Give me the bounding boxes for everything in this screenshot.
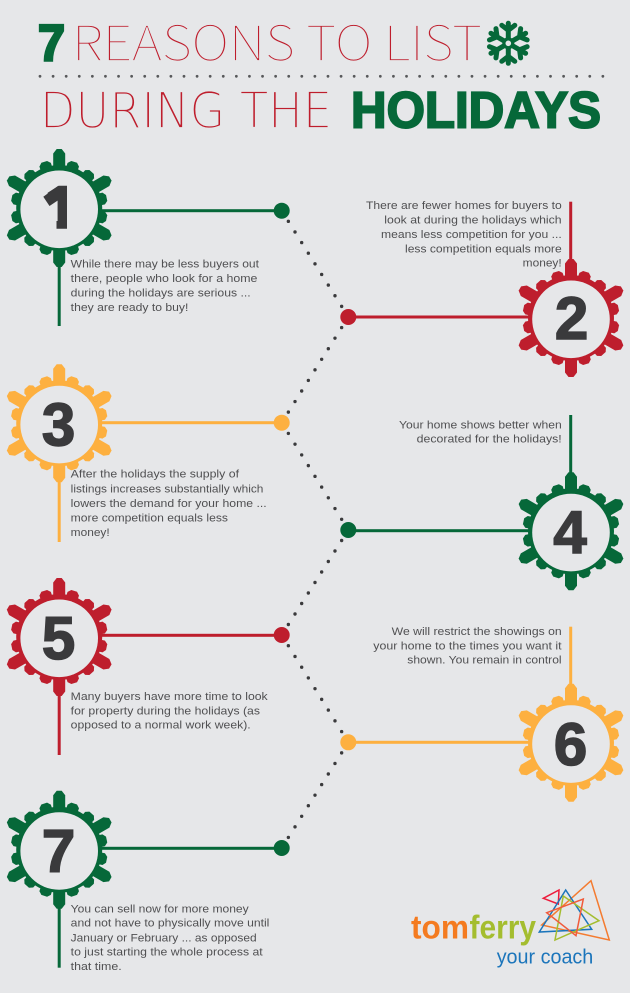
text 3: listings increases substantially which — [71, 483, 263, 495]
gear 2 — [510, 259, 630, 377]
title — [38, 4, 603, 140]
gear 7 — [0, 791, 121, 909]
title line two: DURING THE — [40, 83, 332, 140]
number 2: 2 — [555, 285, 588, 352]
text 2: less competition equals more — [405, 243, 562, 255]
text 6: We will restrict the showings on — [392, 626, 562, 638]
logo tagline: your coach — [497, 946, 593, 968]
text 7: You can sell now for more money — [71, 903, 249, 915]
number 1: 1 — [44, 174, 78, 241]
reason 4 — [340, 415, 630, 590]
text 2: money! — [523, 258, 562, 270]
reason 3 — [0, 364, 290, 542]
text 4: decorated for the holidays! — [417, 434, 562, 446]
number 1 — [43, 186, 67, 229]
number 4: 4 — [553, 499, 587, 566]
title line one: REASONS TO LIST — [72, 4, 482, 74]
text 1: there, people who look for a home — [71, 273, 257, 285]
reason 5 — [0, 578, 290, 755]
text 3: After the holidays the supply of — [71, 469, 240, 481]
reason 1 — [0, 149, 290, 326]
gear 3 — [0, 364, 121, 482]
text 3: money! — [71, 527, 110, 539]
text 5: Many buyers have more time to look — [71, 691, 268, 703]
text 1: While there may be less buyers out — [71, 259, 260, 271]
text 1: they are ready to buy! — [71, 302, 188, 314]
text 1: during the holidays are serious ... — [71, 288, 251, 300]
gear 4 — [510, 472, 630, 590]
text 6: your home to the times you want it — [373, 640, 562, 652]
text 2: look at during the holidays which — [384, 214, 562, 226]
text 5: opposed to a normal work week). — [71, 720, 251, 732]
logo triangles — [539, 881, 609, 940]
reason 6 — [340, 626, 630, 802]
text 7: January or February ... as opposed — [71, 932, 257, 944]
gear 6 — [510, 684, 630, 802]
text 7: that time. — [71, 961, 122, 973]
logo: ferry — [470, 908, 537, 946]
number 6: 6 — [554, 711, 587, 778]
title holidays: HOLIDAYS — [351, 82, 601, 139]
logo wordmark: tom — [411, 908, 469, 946]
gear 5 — [0, 578, 121, 696]
text 7: to just starting the whole process at — [71, 947, 264, 959]
reason 7 — [0, 791, 290, 973]
title number 7: 7 — [38, 14, 65, 72]
text 3: more competition equals less — [71, 512, 228, 524]
number 7: 7 — [42, 818, 75, 884]
dotted connector — [282, 211, 348, 848]
text 2: means less competition for you ... — [381, 229, 562, 241]
text 3: lowers the demand for your home ... — [71, 498, 267, 510]
text 5: for property during the holidays (as — [71, 705, 260, 717]
number 3: 3 — [42, 392, 75, 458]
number 5: 5 — [42, 605, 75, 672]
text 7: and not have to physically move until — [71, 918, 269, 930]
gear 1 — [0, 149, 121, 267]
reason 2 — [340, 200, 630, 377]
logo — [411, 881, 609, 968]
icon: snowflake — [488, 23, 529, 63]
text 2: There are fewer homes for buyers to — [366, 200, 562, 212]
text 4: Your home shows better when — [399, 419, 562, 431]
text 6: shown. You remain in control — [407, 655, 562, 667]
